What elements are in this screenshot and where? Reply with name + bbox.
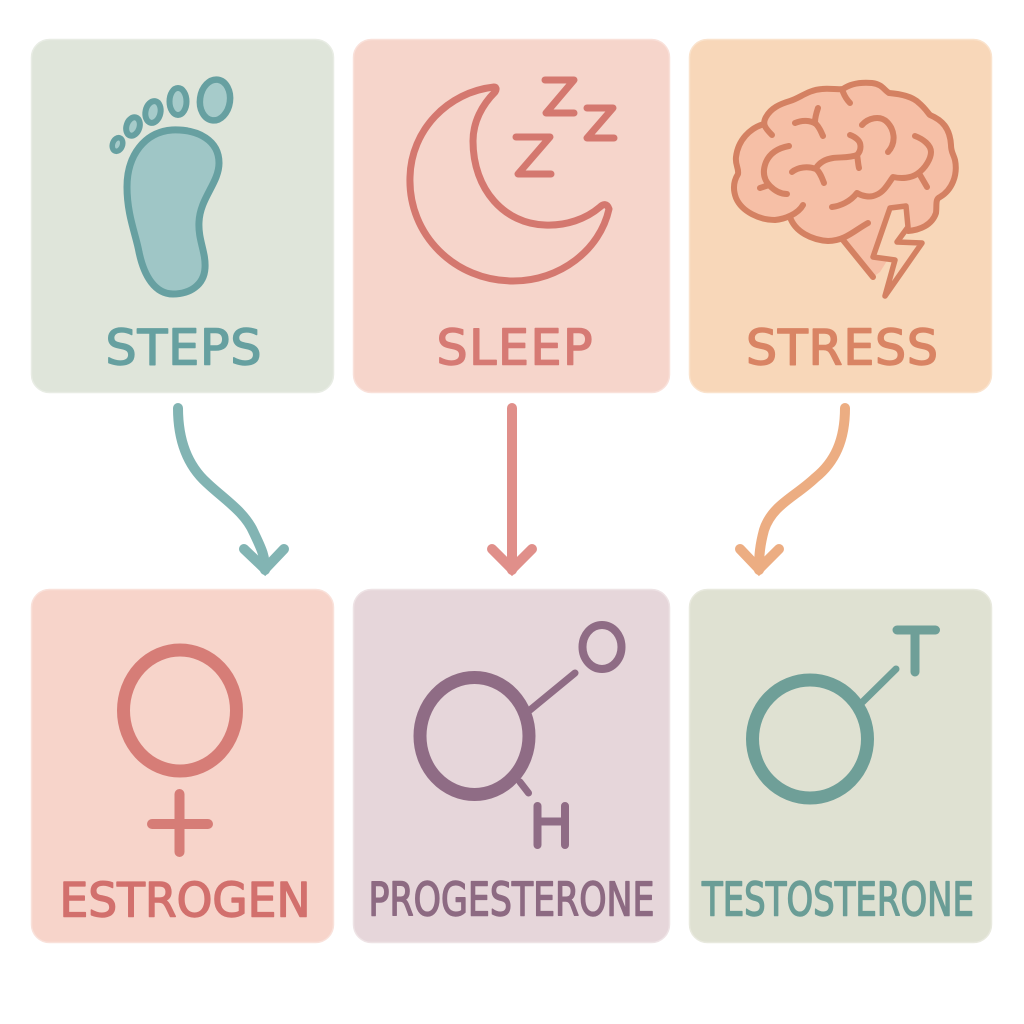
panel: estrogen <box>32 590 334 942</box>
arrow: sleep to progesterone <box>492 408 532 570</box>
arrow: stress to testosterone <box>740 408 845 570</box>
icon: foot <box>110 78 233 294</box>
heading: estrogen: ESTROGEN <box>60 874 310 928</box>
panel: sleep <box>354 40 670 392</box>
panel: testosterone <box>690 590 992 942</box>
icon: female symbol <box>124 650 236 852</box>
panel: stress <box>690 40 992 392</box>
heading: sleep: SLEEP <box>436 320 592 376</box>
heading: steps: STEPS <box>106 320 262 376</box>
icon: male symbol <box>752 630 936 798</box>
arrow: steps to estrogen <box>178 408 284 570</box>
heading: progesterone: PROGESTERONE <box>368 872 654 926</box>
icon: brain with lightning bolt <box>734 83 956 296</box>
panel: steps <box>32 40 334 392</box>
icon: crescent moon and Z letters <box>410 80 614 281</box>
heading: stress: STRESS <box>746 320 938 376</box>
panel: progesterone <box>354 590 670 942</box>
icon: progesterone symbol <box>420 625 622 845</box>
